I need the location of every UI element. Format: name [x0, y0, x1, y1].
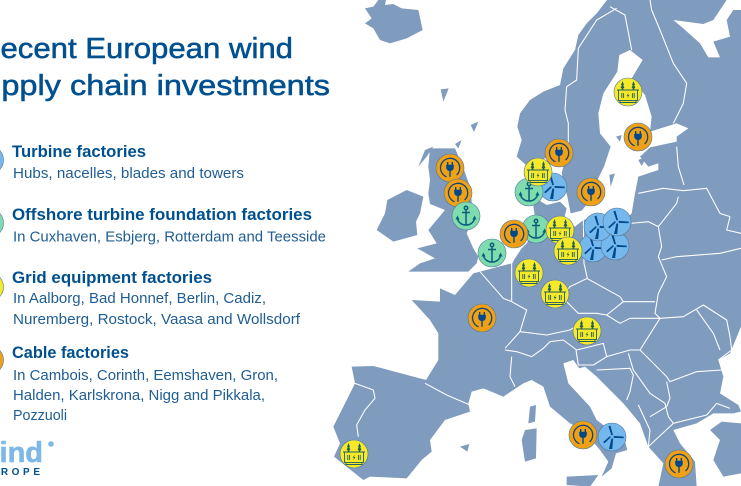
cable marker: Pozzuoli	[569, 421, 597, 449]
legend: cable factories: Halden, Karlskrona, Nigg and Pikkala,	[13, 388, 265, 404]
title	[0, 33, 330, 102]
legend: cable factories: In Cambois, Corinth, Eemshaven, Gron,	[13, 368, 278, 384]
grid marker: Wollsdorf	[573, 317, 601, 345]
map of Europe	[333, 0, 741, 486]
grid marker: Bad Honnef	[515, 259, 543, 287]
grid marker: Berlin	[554, 237, 582, 265]
legend: grid equipment factories	[0, 268, 301, 328]
turbine marker: Germany west	[579, 234, 607, 262]
legend: cable factories: Pozzuoli	[13, 408, 67, 424]
cable marker: Gron	[468, 304, 496, 332]
anchor marker: Cuxhaven	[522, 215, 550, 243]
anchor marker: Rotterdam	[478, 239, 506, 267]
legend: cable factories: Cable factories	[12, 343, 129, 362]
legend: grid equipment factories: Grid equipment factories	[12, 268, 212, 287]
anchor marker: Esbjerg	[515, 178, 543, 206]
cable marker: Nigg	[436, 154, 464, 182]
legend: offshore foundation factories	[0, 205, 326, 246]
turbine marker: southern Italy	[598, 423, 626, 451]
grid marker: Vaasa	[614, 78, 642, 106]
White Sea cut-out	[673, 0, 741, 57]
turbine marker: Germany east	[601, 232, 629, 260]
cable marker: Pikkala	[624, 123, 652, 151]
Ireland	[377, 190, 423, 242]
cable marker: Corinth	[665, 450, 693, 478]
country borders	[355, 0, 741, 447]
cable marker: Cambois	[444, 179, 472, 207]
legend: offshore foundation factories: In Cuxhaven, Esbjerg, Rotterdam and Teesside	[13, 230, 326, 246]
legend: grid equipment factories: In Aalborg, Bad Honnef, Berlin, Cadiz,	[13, 291, 266, 307]
cable marker: Eemshaven	[500, 220, 528, 248]
legend: grid equipment factories: Nuremberg, Rostock, Vaasa and Wollsdorf	[13, 312, 301, 328]
Great Britain	[408, 148, 478, 272]
turbine marker: Baltic coast west	[584, 213, 612, 241]
legend: offshore foundation factories: Offshore turbine foundation factories	[12, 205, 312, 224]
grid marker: Aalborg	[524, 158, 552, 186]
grid marker: Rostock	[546, 216, 574, 244]
Turkey	[710, 422, 741, 477]
grid marker: Nuremberg	[541, 280, 569, 308]
Islands	[418, 88, 647, 486]
Iceland	[365, 0, 423, 43]
grid marker: Cadiz	[340, 440, 368, 468]
legend: turbine factories: Hubs, nacelles, blades and towers	[13, 166, 244, 182]
cable marker: Halden	[545, 139, 573, 167]
legend: cable factories	[0, 343, 278, 424]
logo: WindEurope	[0, 437, 54, 478]
turbine marker: Baltic coast east	[603, 208, 631, 236]
mainland landmass	[333, 0, 741, 486]
turbine marker: Denmark	[539, 173, 567, 201]
markers	[340, 78, 693, 478]
anchor marker: Teesside	[452, 202, 480, 230]
legend: turbine factories: Turbine factories	[12, 142, 146, 161]
cable marker: Karlskrona	[577, 178, 605, 206]
legend: turbine factories	[0, 142, 244, 182]
